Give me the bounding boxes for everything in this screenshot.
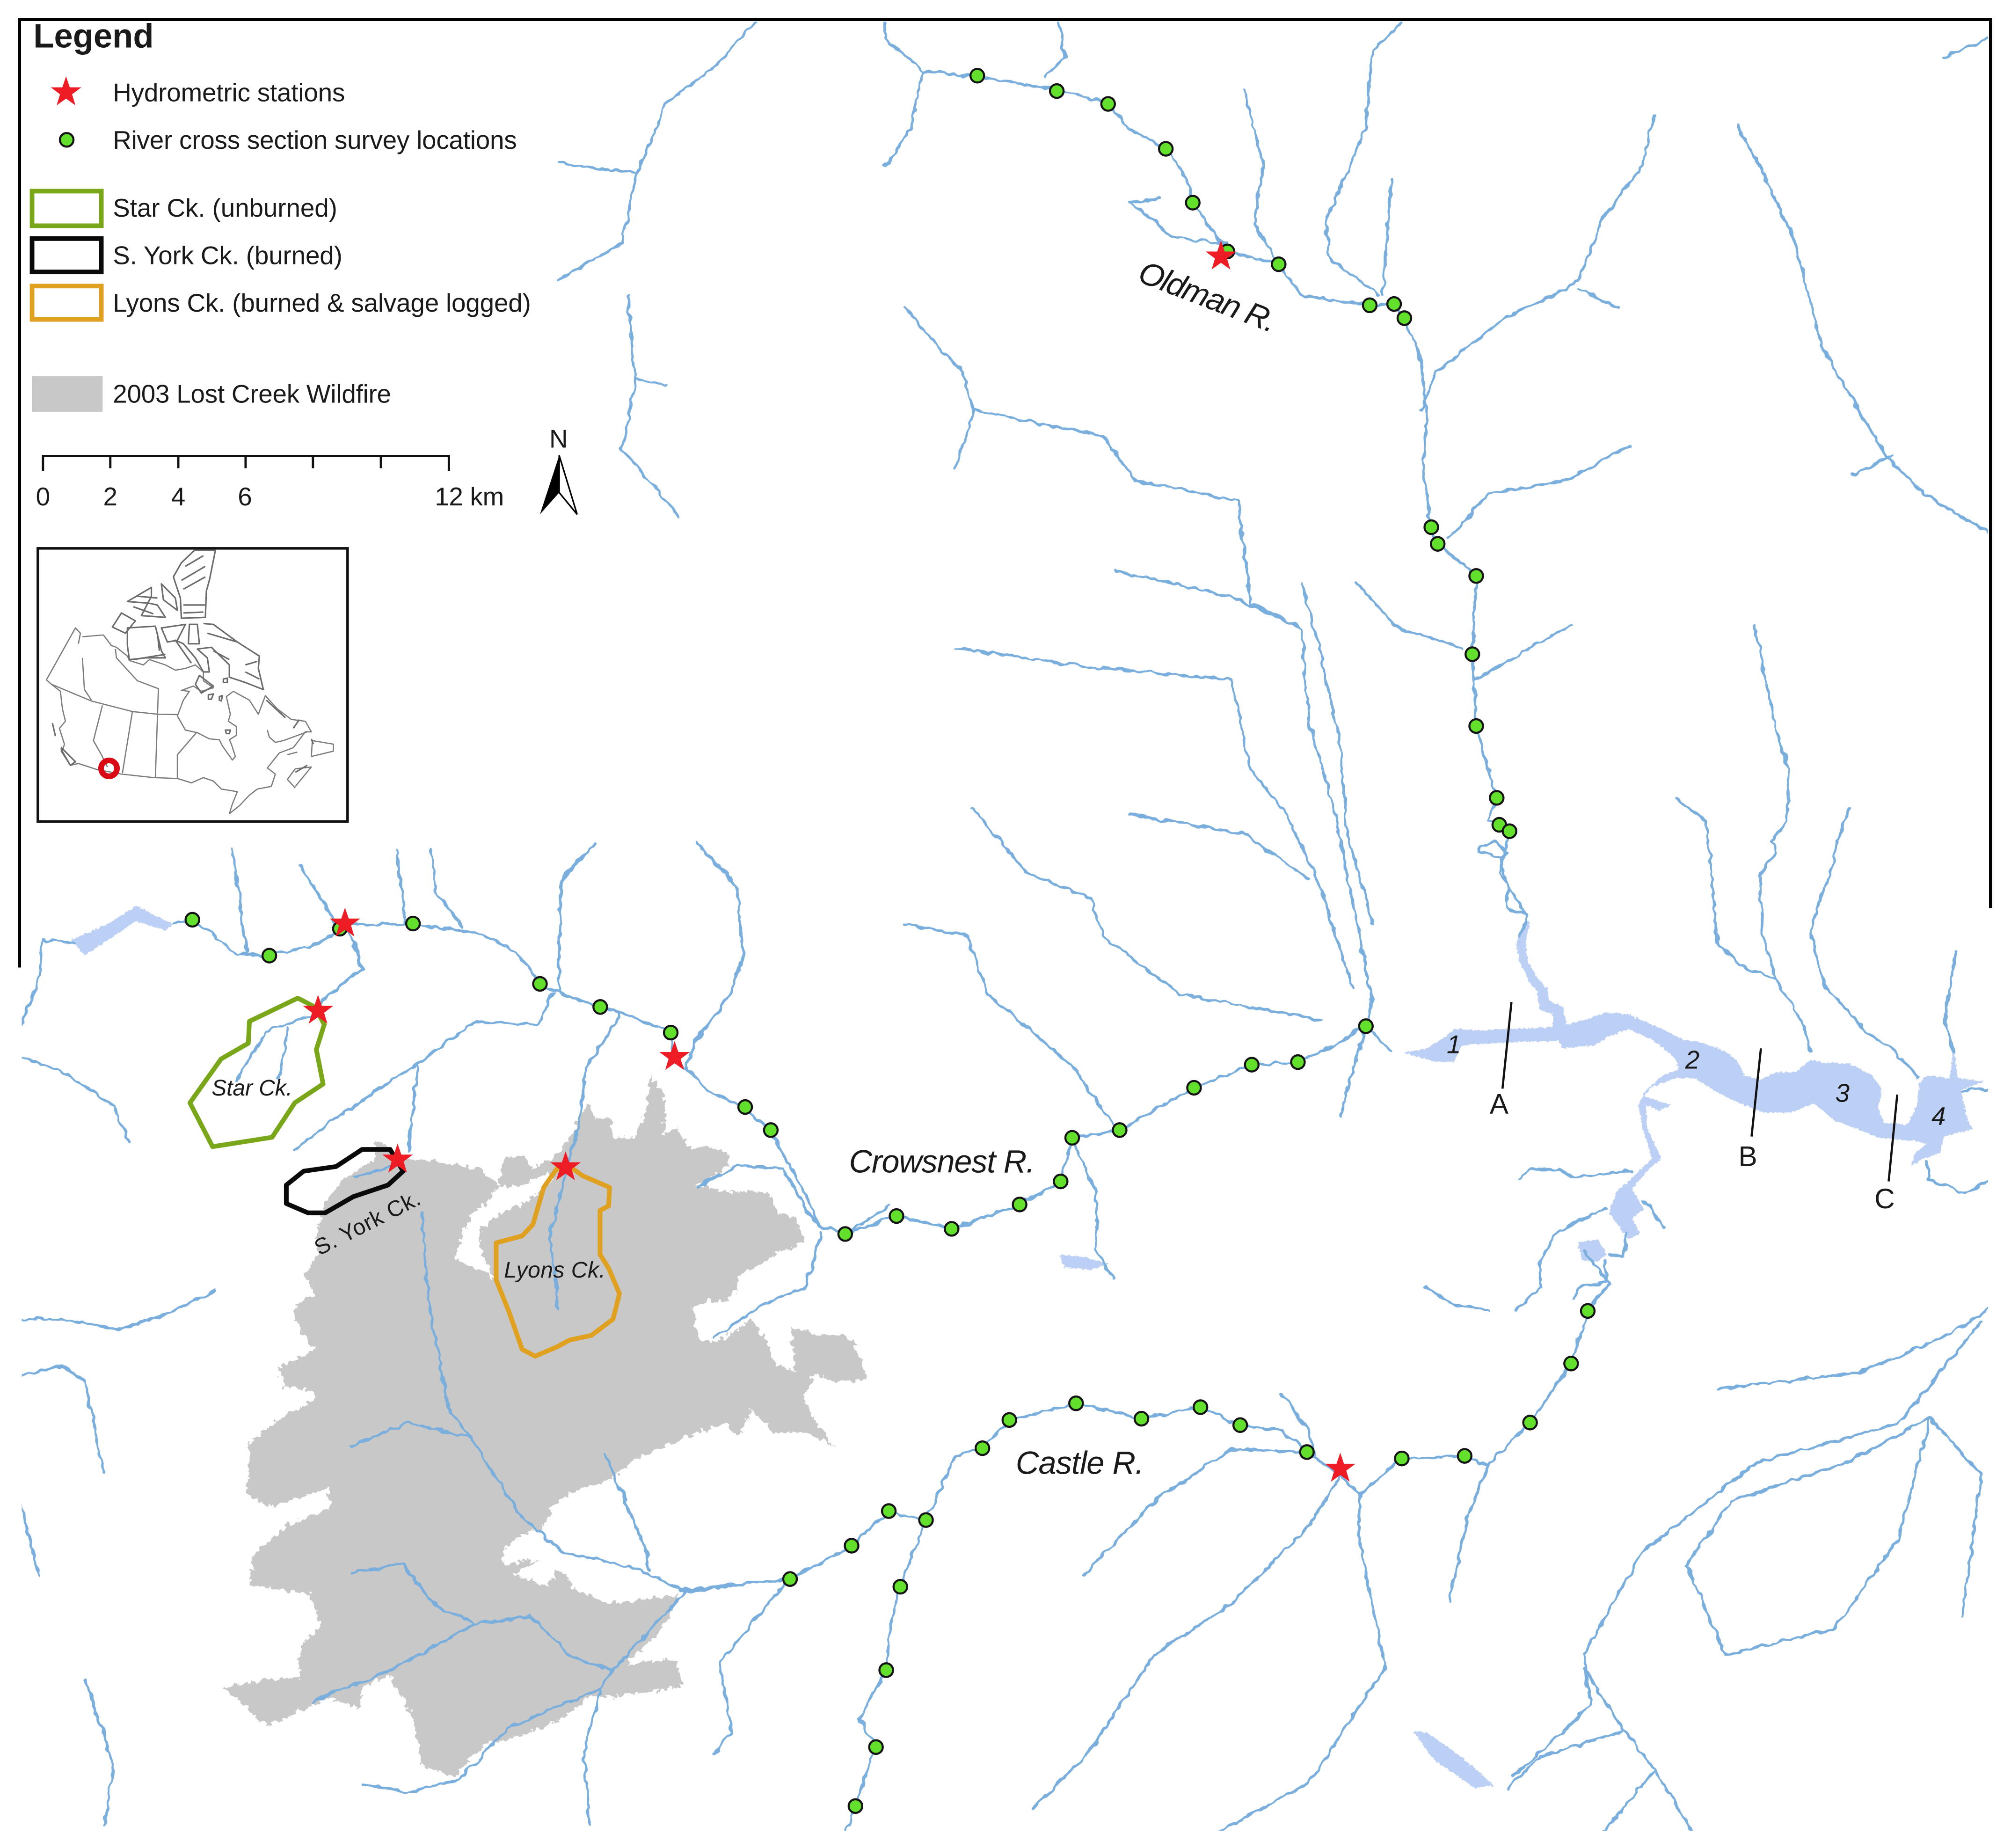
- north arrow: N: [549, 424, 568, 453]
- catchment names: [211, 1076, 605, 1283]
- scale bar: 6: [238, 482, 252, 511]
- river: Crowsnest River and western tributaries: [20, 843, 889, 1825]
- burned area: 2003 Lost Creek Wildfire: [224, 1076, 866, 1777]
- catchment names: Lyons Ck.: [504, 1258, 605, 1283]
- reservoir reach numbers: 2: [1685, 1045, 1699, 1074]
- section labels: [1490, 1088, 1895, 1214]
- catchment: Lyons Ck.: [496, 1167, 619, 1356]
- reservoir section lines A B C: [1502, 1002, 1897, 1182]
- river names: Crowsnest R.: [849, 1143, 1035, 1179]
- legend: Star Ck.: [32, 191, 337, 226]
- river names: Oldman R.: [1134, 254, 1282, 339]
- catchment names: Star Ck.: [211, 1076, 292, 1101]
- hydrometric stations: [303, 241, 1355, 1482]
- catchment: Star Ck.: [190, 998, 324, 1147]
- section labels: C: [1874, 1183, 1895, 1214]
- catchment: S. York Ck.: [286, 1149, 403, 1213]
- rivers: central tributaries: [904, 308, 1372, 1279]
- legend: hydrometric stations: Hydrometric stations: [113, 78, 345, 107]
- scale bar: 12 km: [435, 482, 504, 511]
- catchment names: S. York Ck.: [310, 1186, 424, 1260]
- scale bar: [36, 456, 504, 511]
- river: Oldman River main stem and tributaries: [885, 19, 1654, 936]
- scale bar: 0: [36, 482, 50, 511]
- reservoir reach numbers: 1: [1447, 1030, 1461, 1059]
- legend: wildfire: 2003 Lost Creek Wildfire: [113, 380, 391, 409]
- scale bar: 4: [171, 482, 185, 511]
- reservoir reach numbers: 3: [1835, 1079, 1850, 1108]
- river cross section survey locations: [186, 69, 1595, 1813]
- legend: S. York Ck.: [32, 239, 342, 272]
- reservoir reach numbers: [1447, 1030, 1946, 1131]
- legend: survey locations: River cross section survey locations: [113, 125, 517, 154]
- catchment outlines: [190, 998, 619, 1356]
- legend title: Legend: [33, 17, 154, 55]
- river names: [849, 254, 1282, 1481]
- legend: wildfire: [32, 376, 391, 412]
- reservoir reach numbers: 4: [1931, 1102, 1946, 1131]
- scale bar: 2: [103, 482, 117, 511]
- legend: S. York Ck.: S. York Ck. (burned): [113, 241, 342, 270]
- inset locator map of Canada: [38, 548, 348, 822]
- inset: Canada outline, provinces and Arctic islands: [46, 550, 333, 814]
- legend: Star Ck.: Star Ck. (unburned): [113, 193, 337, 222]
- rivers: northwest tributaries: [558, 19, 757, 517]
- north arrow: [540, 424, 577, 514]
- river: Castle River and southern tributaries: [680, 1251, 1990, 1832]
- section labels: A: [1490, 1088, 1509, 1119]
- inset: study area marker: [101, 760, 117, 776]
- reservoir and lakes: [71, 906, 1985, 1788]
- rivers: eastern tributaries: [1676, 38, 1988, 843]
- river: Crowsnest River eastern reach: [845, 1026, 1392, 1234]
- legend: [32, 17, 531, 412]
- section labels: B: [1739, 1140, 1757, 1172]
- river names: Castle R.: [1016, 1445, 1144, 1481]
- legend: Lyons Ck.: Lyons Ck. (burned & salvage logged): [113, 288, 531, 317]
